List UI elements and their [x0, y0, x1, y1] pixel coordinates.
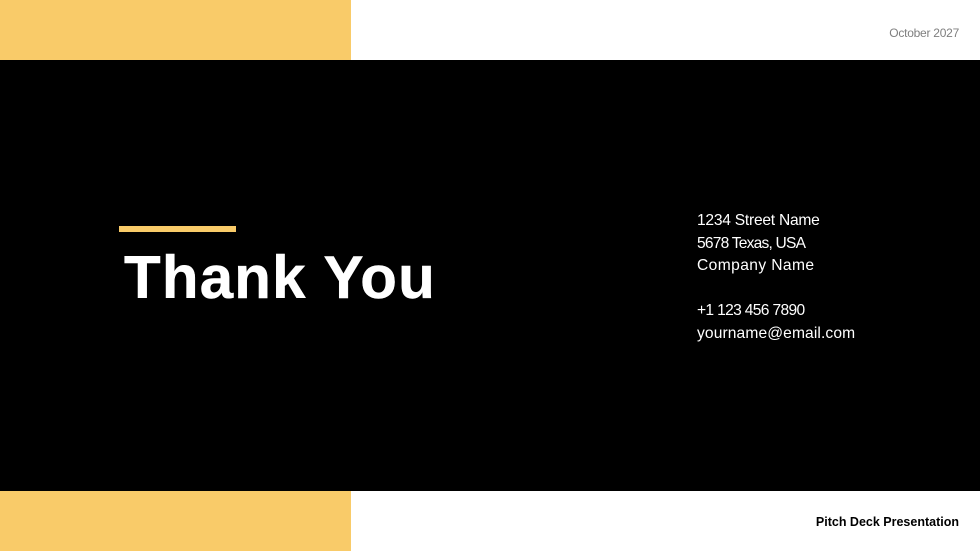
- top yellow block: [0, 0, 351, 60]
- bottom yellow block: [0, 491, 351, 551]
- contact details: 5678 Texas, USA: [697, 234, 805, 252]
- contact details: Company Name: [697, 257, 814, 274]
- contact details: +1 123 456 7890: [697, 302, 804, 319]
- black main panel: [0, 60, 980, 491]
- contact details: [697, 212, 855, 342]
- footer label: Pitch Deck Presentation: [816, 515, 959, 529]
- contact details: yourname@email.com: [697, 324, 855, 342]
- title: Thank You: [124, 244, 436, 311]
- contact details: 1234 Street Name: [697, 212, 820, 229]
- yellow accent bar: [119, 226, 236, 232]
- date label: October 2027: [889, 26, 959, 40]
